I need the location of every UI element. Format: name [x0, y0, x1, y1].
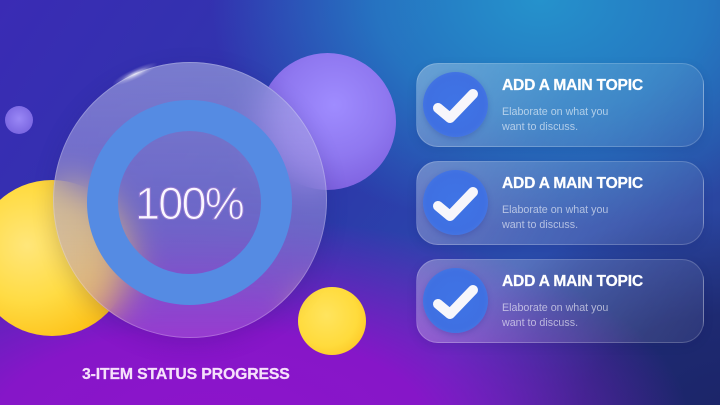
- card: topic 2: [416, 161, 704, 245]
- body text 2: [502, 204, 608, 231]
- body text 3: Elaborate on what you: [502, 302, 608, 314]
- sphere: large yellow: [0, 180, 130, 336]
- title: 3-ITEM STATUS PROGRESS: [82, 366, 290, 383]
- sphere: small purple: [5, 106, 33, 134]
- progress ring: [87, 100, 292, 305]
- heading 3: ADD A MAIN TOPIC: [502, 273, 643, 290]
- sphere: small yellow: [298, 287, 366, 355]
- body text 3: want to discuss.: [502, 317, 578, 329]
- glass disc with progress ring: [53, 62, 327, 338]
- card: topic 1: [416, 63, 704, 147]
- heading 2: ADD A MAIN TOPIC: [502, 175, 643, 192]
- icon: check badge 3: [423, 268, 488, 333]
- percentage label: 100%: [135, 178, 243, 229]
- body text 1: [502, 106, 608, 133]
- heading 1: ADD A MAIN TOPIC: [502, 77, 643, 94]
- body text 1: Elaborate on what you: [502, 106, 608, 118]
- icon: check badge 1: [423, 72, 488, 137]
- body text 3: [502, 302, 608, 329]
- card: topic 3: [416, 259, 704, 343]
- icon: check badge 2: [423, 170, 488, 235]
- glass highlight glint: [107, 53, 163, 95]
- sphere: large purple: [259, 53, 396, 190]
- body text 2: Elaborate on what you: [502, 204, 608, 216]
- body text 2: want to discuss.: [502, 219, 578, 231]
- body text 1: want to discuss.: [502, 121, 578, 133]
